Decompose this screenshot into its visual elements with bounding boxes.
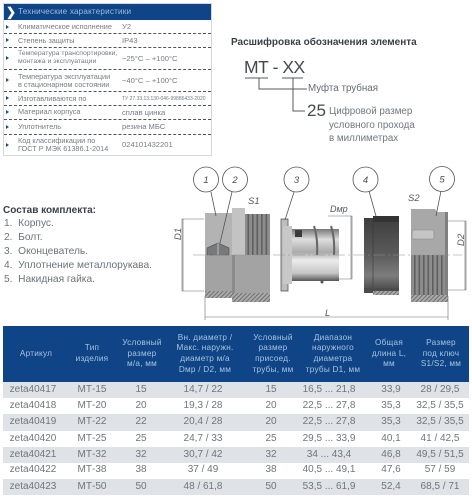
table rows: 24,7 / 33	[184, 433, 222, 444]
spec rows	[4, 22, 211, 153]
table rows: 30,7 / 42	[184, 449, 222, 460]
table rows: 32	[135, 449, 147, 460]
heading: designation decoding: Расшифровка обозначения элемента	[231, 37, 417, 48]
table rows: 52,4	[381, 481, 401, 492]
table rows: МТ-32	[78, 449, 106, 460]
table: product specifications: трубы D1, мм	[306, 365, 360, 374]
table: product specifications: Диапазон	[314, 333, 352, 342]
table: product specifications: размер	[127, 349, 156, 358]
table rows: 19,3 / 28	[184, 400, 222, 411]
heading: kit contents: Состав комплекта:	[3, 205, 96, 216]
callout numbers: 5	[439, 174, 445, 186]
designation diagram: условного прохода	[329, 120, 415, 130]
designation diagram: Муфта трубная	[308, 83, 378, 94]
table rows: МТ-50	[78, 481, 106, 492]
spec rows: ТУ 27.33.13.130-046-99886433-2020	[122, 96, 206, 102]
table rows: 22,5 ... 27,8	[303, 416, 355, 427]
table rows: 20	[135, 400, 147, 411]
spec rows: монтажа и эксплуатации	[18, 58, 96, 65]
callout numbers: 2	[231, 175, 238, 186]
table rows	[3, 382, 469, 495]
dimension labels: D1	[173, 228, 184, 240]
table rows: 47,6	[381, 464, 401, 475]
table rows: 20,4 / 28	[184, 416, 222, 427]
table rows: 41 / 42,5	[421, 433, 459, 444]
callout numbers: 1	[203, 175, 209, 186]
table rows: 32,5 / 35,5	[416, 400, 464, 411]
table: product specifications: размер	[258, 343, 288, 352]
table rows: 29,5 ... 33,9	[303, 433, 355, 444]
table: product specifications: Тип	[85, 343, 99, 352]
table: product specifications: длина L,	[372, 349, 406, 358]
table rows: 38	[135, 464, 147, 475]
table rows: 68,5 / 71	[421, 481, 459, 492]
heading: technical specifications bar: ❯	[6, 5, 16, 19]
table rows: МТ-38	[78, 464, 106, 475]
spec rows: Температура эксплуатации	[18, 72, 110, 80]
table rows: 35,3	[381, 416, 401, 427]
table rows: 53,5 ... 61,9	[303, 481, 355, 492]
table: product specifications: Условный	[122, 338, 162, 347]
part 3: terminator	[281, 219, 339, 291]
table rows: 16,5 ... 21,8	[303, 384, 355, 395]
table: product specifications: под ключ	[423, 349, 459, 358]
table rows: 34 ... 43,4	[307, 449, 351, 460]
designation diagram: МТ - ХХ	[244, 57, 305, 77]
designation diagram	[244, 57, 415, 144]
table: product specifications: Макс. наружн.	[176, 343, 234, 352]
table rows: 40,1	[381, 433, 401, 444]
spec rows: Изготавливаются по	[18, 94, 86, 103]
heading: technical specifications bar: Технические характеристики	[18, 7, 131, 16]
table rows: 15	[135, 384, 147, 395]
table rows: zeta40421	[10, 449, 56, 460]
table rows: 25	[135, 433, 147, 444]
table: product specifications: трубы, мм	[252, 365, 294, 374]
spec rows: Материал корпуса	[18, 107, 80, 116]
table rows: 32	[265, 449, 277, 460]
dimension labels	[173, 193, 467, 319]
spec rows: ГОСТ Р МЭК 61386.1-2014	[18, 144, 108, 153]
table rows: 57 / 59	[425, 464, 455, 475]
table rows: zeta40419	[10, 416, 56, 427]
kit contents list: 3. Оконцеватель.	[4, 246, 88, 257]
table header	[3, 326, 469, 382]
table: product specifications: диаметр м/а	[180, 354, 230, 363]
table rows: 37 / 49	[188, 464, 218, 475]
technical drawing: exploded coupling	[173, 166, 467, 320]
panel: technical specifications	[3, 3, 212, 156]
spec rows: Код классификации по	[18, 136, 95, 145]
spec rows: 024101432201	[122, 140, 173, 149]
table rows: 48 / 61,8	[184, 481, 222, 492]
table rows: 38	[265, 464, 277, 475]
spec rows: резина МБС	[122, 122, 165, 131]
table rows: zeta40417	[10, 384, 56, 395]
kit contents list: 4. Уплотнение металлорукава.	[4, 260, 152, 271]
table rows: zeta40418	[10, 400, 56, 411]
table rows: 50	[265, 481, 277, 492]
kit contents list: 1. Корпус.	[4, 218, 54, 229]
table rows: 20	[265, 416, 277, 427]
part 1 and 2: body and bolt	[205, 208, 270, 302]
dimension labels: L	[325, 308, 330, 319]
table rows: zeta40422	[10, 464, 56, 475]
designation diagram: Цифровой размер	[329, 106, 412, 117]
table rows: 35,3	[381, 400, 401, 411]
table rows: 22	[135, 416, 147, 427]
spec rows: Климатическое исполнение	[18, 22, 112, 31]
table: product specifications: изделия	[76, 354, 108, 363]
table rows: 46,8	[381, 449, 401, 460]
dimension labels: Dмр	[330, 204, 348, 214]
spec rows: в стационарном состоянии	[18, 80, 109, 89]
table rows: МТ-22	[78, 416, 106, 427]
table: product specifications: Общая	[375, 338, 403, 347]
table: product specifications: Вн. диаметр /	[178, 333, 232, 342]
callout numbers: 4	[363, 175, 368, 186]
designation diagram: в миллиметрах	[329, 133, 398, 144]
kit contents list: 2. Болт.	[4, 232, 43, 243]
table rows: 25	[265, 433, 277, 444]
table: product specifications: Dмр / D2, мм	[179, 365, 231, 374]
callout numbers: 3	[294, 175, 300, 186]
table: product specifications: S1/S2, мм	[421, 359, 461, 368]
spec rows: −40°C – +100°C	[122, 76, 177, 85]
part 5: union nut	[411, 209, 448, 302]
spec rows: У2	[122, 22, 131, 31]
dimension lines	[182, 216, 466, 320]
table: product specifications: м/а, мм	[127, 359, 157, 368]
dimension labels: S1	[248, 196, 260, 207]
table rows: МТ-15	[78, 384, 106, 395]
spec rows: −25°C – +100°C	[122, 54, 177, 63]
table rows: 49,5 / 51,5	[416, 449, 464, 460]
table: product specifications: диаметра	[314, 354, 352, 363]
heading: technical specifications bar	[4, 4, 211, 20]
callout numbers	[194, 166, 454, 243]
table rows: МТ-25	[78, 433, 106, 444]
table rows: 50	[135, 481, 147, 492]
table: product specifications: мм	[383, 359, 395, 368]
table rows: 40,5 ... 49,1	[303, 464, 355, 475]
spec rows: Степень защиты	[18, 36, 75, 45]
kit contents list	[4, 218, 152, 285]
table rows: 14,7 / 22	[184, 384, 222, 395]
table: product specifications: Условный	[253, 333, 293, 342]
table rows: 33,9	[381, 384, 401, 395]
table rows: МТ-20	[78, 400, 106, 411]
table rows: 15	[265, 384, 277, 395]
dimension labels: S2	[408, 193, 420, 204]
table rows: 22,5 ... 27,8	[303, 400, 355, 411]
spec rows: IP43	[122, 36, 138, 45]
spec rows: Уплотнитель	[18, 122, 61, 131]
kit contents list: 5. Накидная гайка.	[4, 274, 95, 285]
dimension labels: D2	[456, 233, 467, 246]
table rows: 32,5 / 35,5	[416, 416, 464, 427]
table rows: zeta40420	[10, 433, 56, 444]
part 4: metal hose seal	[364, 216, 399, 295]
center axis	[193, 254, 462, 256]
table rows: zeta40423	[10, 481, 56, 492]
spec rows: сплав цинка	[122, 108, 165, 117]
table: product specifications: Артикул	[20, 349, 52, 358]
table: product specifications: Размер	[426, 338, 456, 347]
spec rows: Температура транспортировки,	[18, 50, 117, 57]
table: product specifications: присоед.	[255, 354, 291, 363]
table rows: 28 / 29,5	[421, 384, 459, 395]
table: product specifications: наружного	[312, 343, 354, 352]
designation diagram: 25	[307, 101, 326, 120]
table rows: 20	[265, 400, 277, 411]
